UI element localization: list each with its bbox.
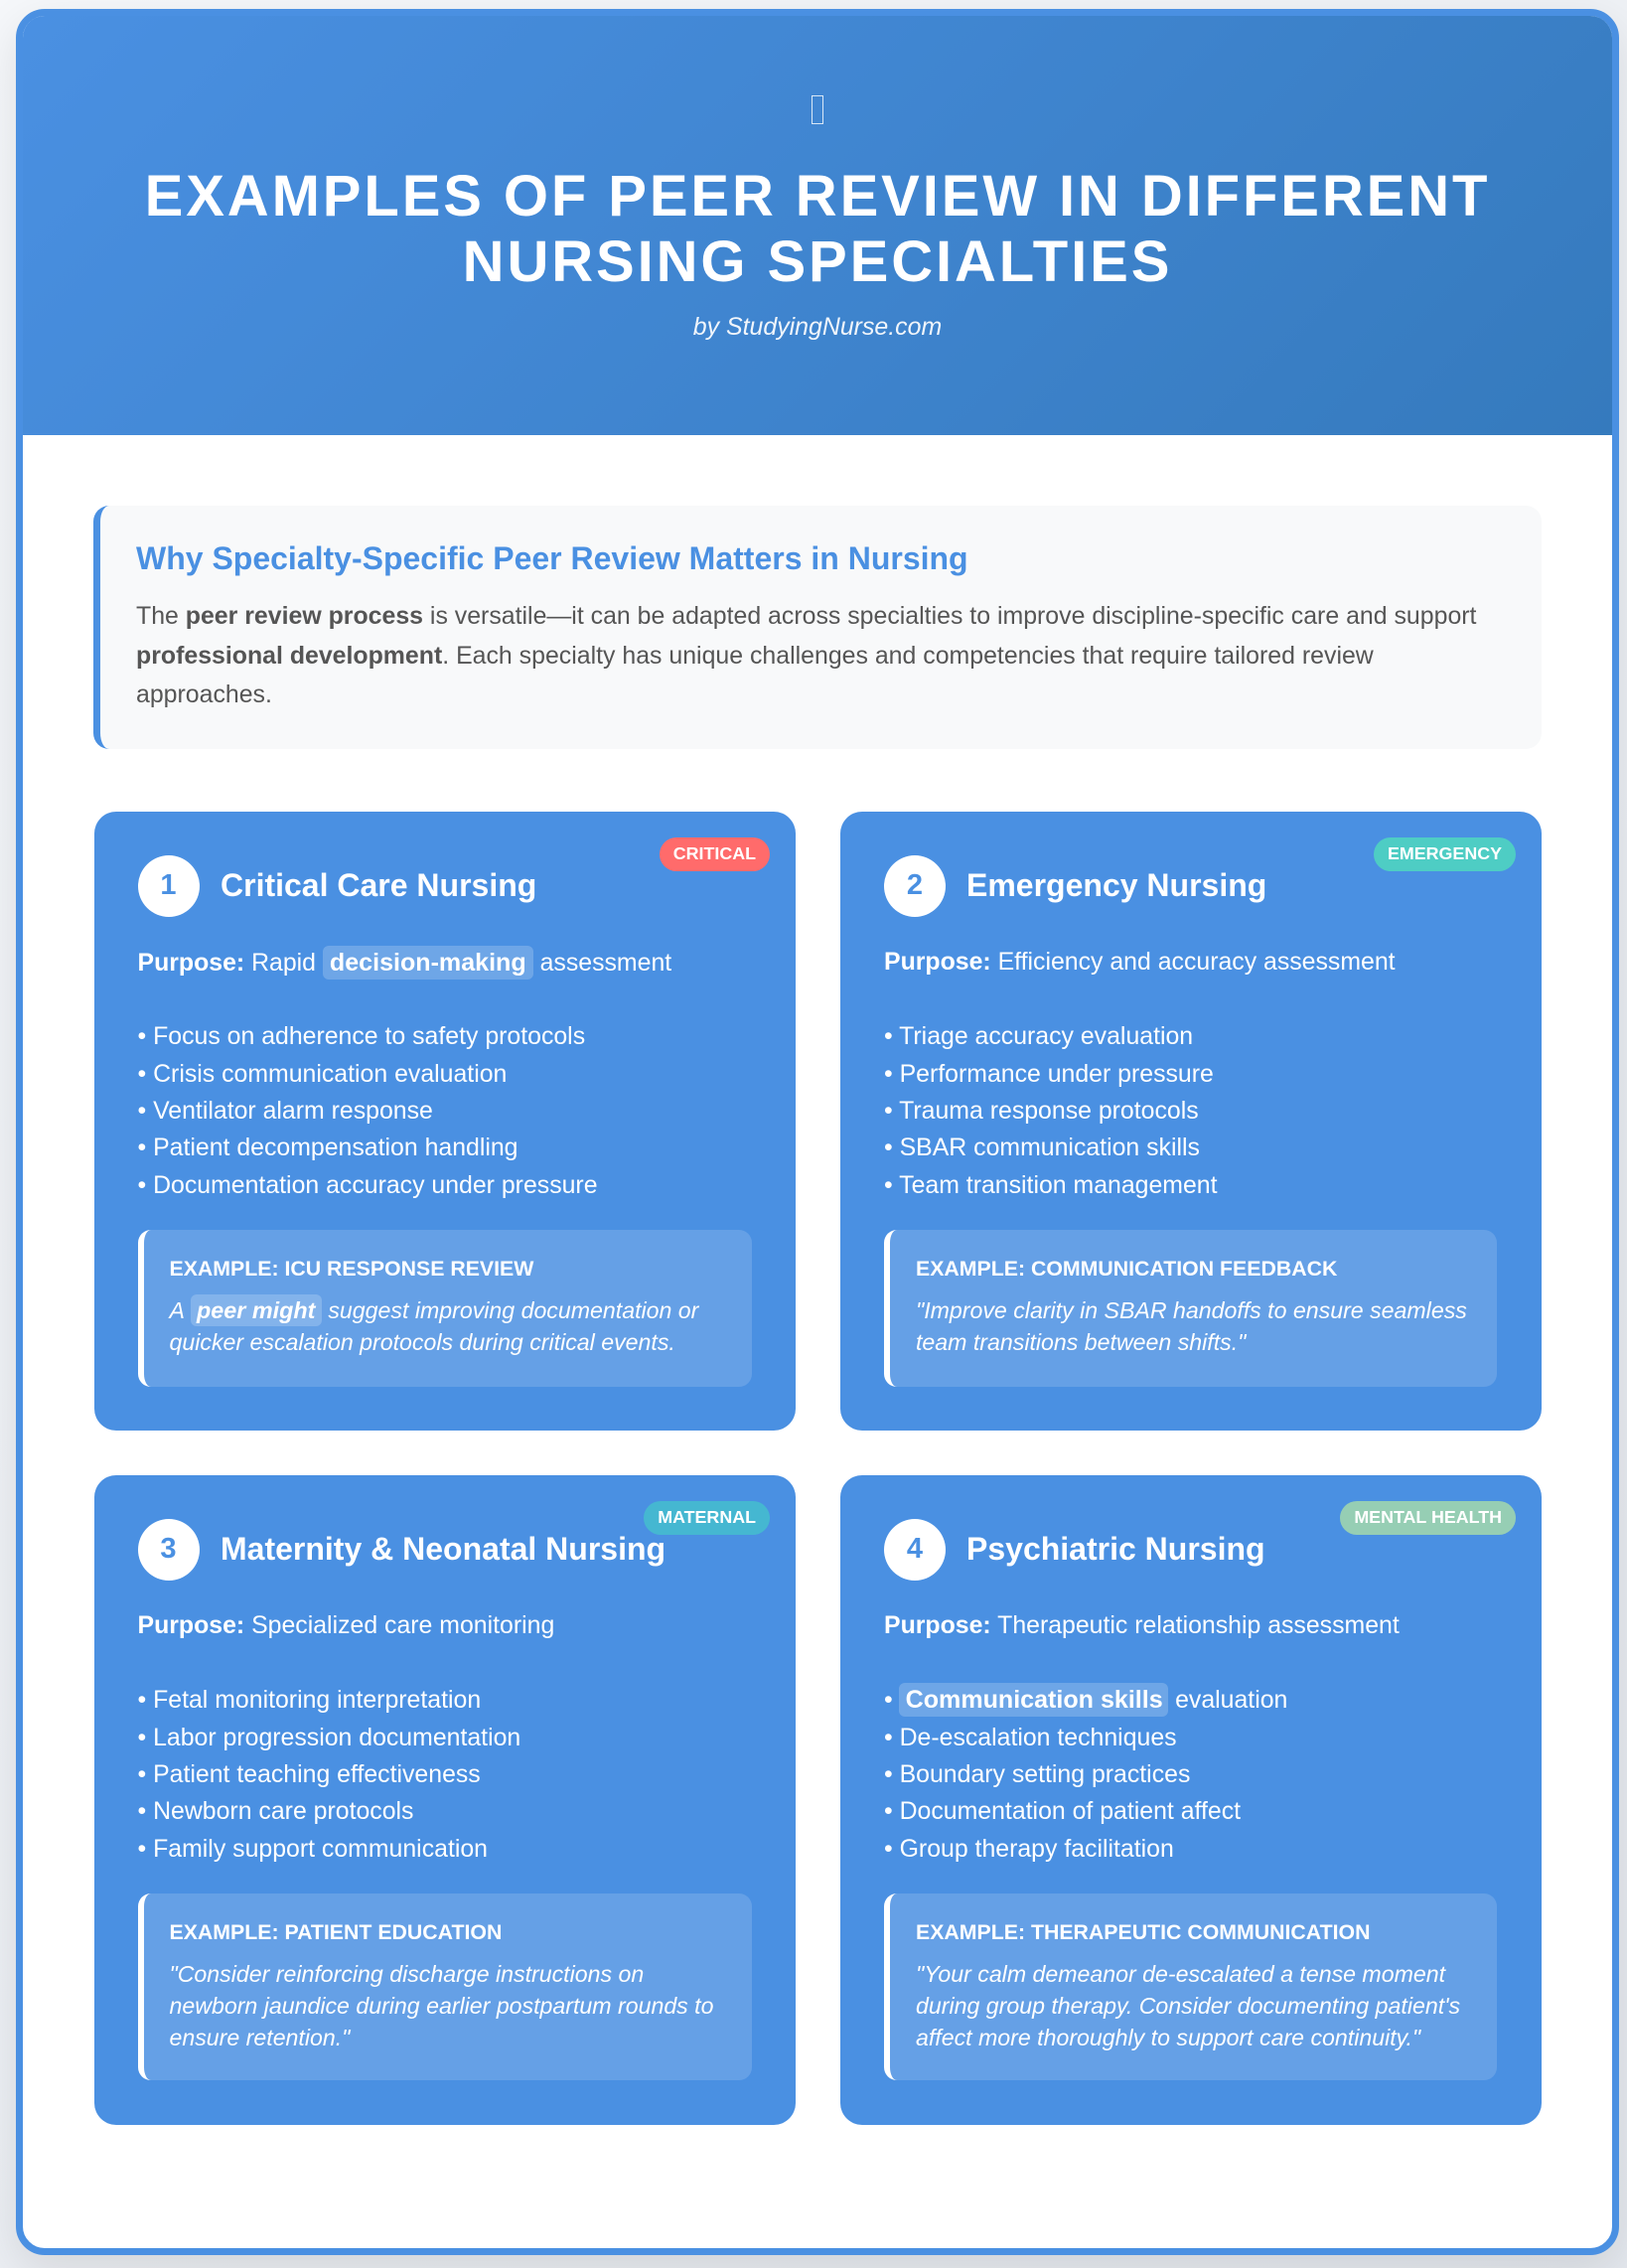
panel: critical care nursing (93, 812, 796, 1431)
checklist: • Fetal monitoring interpretation (137, 1687, 481, 1714)
purpose: Purpose: Therapeutic relationship assessment (884, 1612, 1400, 1639)
title: NURSING SPECIALTIES (463, 228, 1172, 294)
number 2 (884, 855, 946, 917)
checklist: • Ventilator alarm response (137, 1098, 433, 1125)
example title: EXAMPLE: THERAPEUTIC COMMUNICATION (916, 1920, 1370, 1944)
checklist: • Team transition management (884, 1172, 1218, 1199)
badge: maternal (644, 1501, 770, 1535)
checklist: • Focus on adherence to safety protocols (137, 1023, 585, 1050)
purpose: Purpose: Specialized care monitoring (137, 1612, 554, 1639)
example callout (884, 1230, 1497, 1387)
checklist (137, 1023, 598, 1199)
example quote (916, 1961, 1460, 2050)
badge: emergency (1374, 837, 1516, 871)
checklist (884, 1683, 1287, 1863)
intro text: professional development. Each specialty has unique challenges and competencies that require tailored review (136, 642, 1374, 670)
subtitle: by StudyingNurse.com (693, 312, 942, 340)
checklist: • SBAR communication skills (884, 1134, 1200, 1161)
checklist: • Triage accuracy evaluation (884, 1023, 1193, 1050)
example quote: quicker escalation protocols during critical events. (169, 1329, 675, 1355)
number 3 (137, 1519, 199, 1581)
example quote: "Your calm demeanor de-escalated a tense moment (916, 1961, 1445, 1987)
example quote: team transitions between shifts." (916, 1329, 1246, 1355)
checklist: • Group therapy facilitation (884, 1836, 1174, 1863)
number 1 (137, 855, 199, 917)
checklist: • Documentation accuracy under pressure (137, 1172, 598, 1199)
number 2: 2 (907, 869, 923, 901)
card heading: Maternity & Neonatal Nursing (221, 1531, 666, 1567)
checklist (137, 1687, 520, 1863)
checklist: • Boundary setting practices (884, 1761, 1190, 1788)
number 3: 3 (160, 1533, 177, 1565)
example title: EXAMPLE: PATIENT EDUCATION (169, 1920, 502, 1944)
checklist: • Communication skills evaluation (884, 1686, 1287, 1714)
example quote: "Consider reinforcing discharge instructions on (169, 1961, 644, 1987)
example quote: newborn jaundice during earlier postpartum rounds to (169, 1993, 713, 2019)
panel: emergency nursing (840, 812, 1542, 1431)
purpose: Purpose: Efficiency and accuracy assessment (884, 949, 1396, 976)
example quote: affect more thoroughly to support care continuity." (916, 2025, 1420, 2050)
number 4 (884, 1519, 946, 1581)
checklist: • Family support communication (137, 1836, 488, 1863)
example quote (169, 1961, 713, 2050)
badge: critical (660, 837, 770, 871)
panel: intro (93, 506, 1542, 749)
checklist: • Patient teaching effectiveness (137, 1761, 481, 1788)
example quote (168, 1294, 699, 1355)
badge: maternal: MATERNAL (658, 1507, 756, 1527)
intro text: The peer review process is versatile—it can be adapted across specialties to improve discipline-specific care and support (136, 602, 1476, 630)
panel: psychiatric nursing (840, 1475, 1542, 2125)
example quote: ensure retention." (169, 2025, 350, 2050)
checklist: • Crisis communication evaluation (137, 1061, 507, 1088)
example quote (916, 1297, 1467, 1355)
badge: critical: CRITICAL (673, 843, 756, 863)
example quote: A peer might suggest improving documentation or (169, 1297, 698, 1323)
checklist (884, 1023, 1218, 1199)
checklist: • Performance under pressure (884, 1061, 1214, 1088)
example callout (137, 1230, 751, 1387)
intro text (136, 602, 1476, 708)
card heading: Psychiatric Nursing (966, 1531, 1265, 1567)
number 1: 1 (160, 869, 177, 901)
checklist: • Documentation of patient affect (884, 1798, 1241, 1825)
panel: maternity and neonatal nursing (93, 1475, 796, 2125)
example title: EXAMPLE: COMMUNICATION FEEDBACK (916, 1257, 1337, 1281)
title: EXAMPLES OF PEER REVIEW IN DIFFERENT (145, 164, 1490, 228)
header banner (23, 16, 1612, 435)
intro text: approaches. (136, 680, 272, 708)
intro heading: Why Specialty-Specific Peer Review Matters in Nursing (136, 540, 968, 576)
card heading: Emergency Nursing (966, 867, 1266, 903)
example title: EXAMPLE: ICU RESPONSE REVIEW (169, 1257, 533, 1281)
checklist: • De-escalation techniques (884, 1725, 1177, 1751)
badge: mental health: MENTAL HEALTH (1354, 1507, 1502, 1527)
checklist: • Labor progression documentation (137, 1725, 520, 1751)
badge: emergency: EMERGENCY (1388, 843, 1502, 863)
example quote: during group therapy. Consider documenting patient's (916, 1993, 1460, 2019)
checklist: • Newborn care protocols (137, 1798, 413, 1825)
purpose: Purpose: Rapid decision-making assessment (137, 949, 671, 977)
example callout (884, 1893, 1497, 2080)
card heading: Critical Care Nursing (221, 867, 536, 903)
badge: mental health (1340, 1501, 1516, 1535)
example callout (137, 1893, 751, 2080)
checklist: • Trauma response protocols (884, 1098, 1199, 1125)
title (145, 164, 1490, 294)
icon: missing glyph box (812, 95, 823, 124)
number 4: 4 (907, 1533, 923, 1565)
example quote: "Improve clarity in SBAR handoffs to ensure seamless (916, 1297, 1467, 1323)
checklist: • Patient decompensation handling (137, 1134, 518, 1161)
